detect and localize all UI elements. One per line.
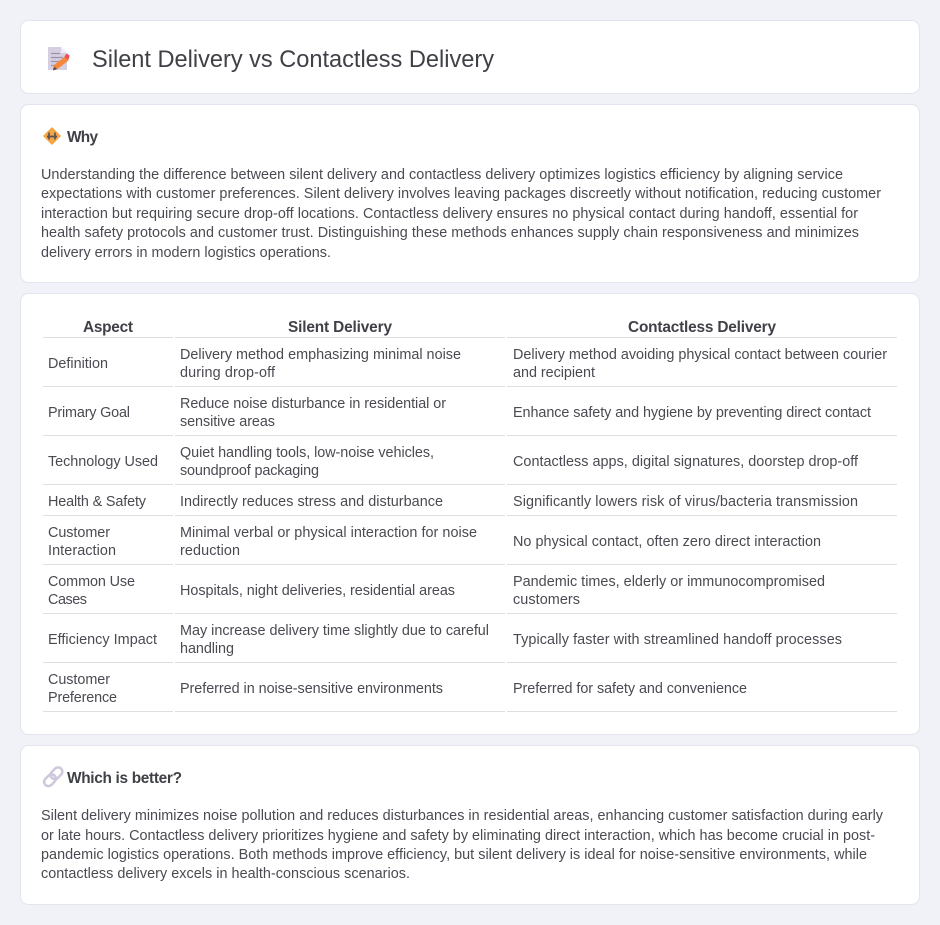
text block: why paragraph: [41, 167, 881, 261]
row: technology used: Quiet handling tools, low-noise vehicles,: [180, 445, 434, 461]
row: efficiency impact: handling: [180, 641, 234, 657]
row: primary goal: [48, 396, 871, 430]
text block: why paragraph: expectations with customer preferences. Silent delivery involves leaving packages discreetly without notification, reducing customer: [41, 186, 881, 202]
row: customer preference: Preferred for safety and convenience: [513, 681, 747, 697]
row: common use cases: Common Use: [48, 574, 135, 590]
row: common use cases: Pandemic times, elderly or immunocompromised: [513, 574, 825, 590]
row: efficiency impact: Efficiency Impact: [48, 632, 157, 648]
row: definition: Delivery method avoiding physical contact between courier: [513, 347, 887, 363]
row: common use cases: customers: [513, 592, 580, 608]
row: primary goal: Primary Goal: [48, 405, 130, 421]
row: primary goal: Reduce noise disturbance in residential or: [180, 396, 446, 412]
text block: which is better paragraph: [41, 808, 884, 882]
text block: why paragraph: interaction but requiring secure drop-off locations. Contactless delivery ensures no physical contact during handoff, essential for: [41, 206, 858, 222]
row: customer interaction: Minimal verbal or physical interaction for noise: [180, 525, 477, 541]
table header row: Contactless Delivery: [628, 319, 776, 336]
row: common use cases: Hospitals, night deliveries, residential areas: [180, 583, 455, 599]
heading: why: Why: [67, 129, 98, 146]
title: Silent Delivery vs Contactless Delivery: [92, 47, 494, 73]
row: efficiency impact: [48, 623, 842, 657]
row: customer interaction: reduction: [180, 543, 240, 559]
icon: warning diamond: [44, 128, 60, 144]
row: definition: [48, 347, 887, 381]
table header row: Aspect: [83, 319, 133, 336]
text block: which is better paragraph: Silent delivery minimizes noise pollution and reduces disturbances in residential areas, enhancing customer satisfaction during early: [41, 808, 884, 824]
panel: why: [20, 104, 920, 282]
row: definition: and recipient: [513, 365, 595, 381]
row: health and safety: Significantly lowers risk of virus/bacteria transmission: [513, 494, 858, 510]
row: definition: Definition: [48, 356, 108, 372]
row: customer preference: Preferred in noise-sensitive environments: [180, 681, 443, 697]
row: efficiency impact: May increase delivery time slightly due to careful: [180, 623, 489, 639]
row: customer interaction: Interaction: [48, 543, 116, 559]
text block: which is better paragraph: contactless delivery excels in health-conscious scenarios.: [41, 866, 410, 882]
text block: why paragraph: Understanding the difference between silent delivery and contactless delivery optimizes logistics efficiency by aligning service: [41, 167, 843, 183]
panel: comparison table: [20, 294, 920, 734]
row: technology used: [48, 445, 859, 479]
row: technology used: Technology Used: [48, 454, 158, 470]
row: customer preference: Customer: [48, 672, 110, 688]
table header row: Silent Delivery: [288, 319, 392, 336]
row: customer interaction: Customer: [48, 525, 110, 541]
row: definition: Delivery method emphasizing minimal noise: [180, 347, 461, 363]
panel: title header: [20, 20, 920, 94]
table header row: [83, 319, 776, 336]
row: efficiency impact: Typically faster with streamlined handoff processes: [513, 632, 842, 648]
row: technology used: soundproof packaging: [180, 463, 319, 479]
icon: document with pencil: [48, 47, 70, 70]
panel: which is better: [20, 746, 920, 904]
row: health and safety: [48, 494, 858, 510]
text block: why paragraph: health safety protocols and customer trust. Distinguishing these methods enhances supply chain responsiveness and minimizes: [41, 225, 859, 241]
row: common use cases: Cases: [48, 592, 87, 608]
text block: which is better paragraph: pandemic logistics operations. Both methods improve efficiency, but silent delivery is ideal for noise-sensitive environments, while: [41, 847, 867, 863]
row: customer preference: Preference: [48, 690, 117, 706]
row: health and safety: Health & Safety: [48, 494, 147, 510]
row: technology used: Contactless apps, digital signatures, doorstep drop-off: [513, 454, 859, 470]
heading: which is better: Which is better?: [67, 770, 182, 787]
row: customer preference: [48, 672, 747, 706]
text block: which is better paragraph: or late hours. Contactless delivery prioritizes hygiene and safety by eliminating direct interaction, which has become crucial in post-: [41, 828, 875, 844]
row: common use cases: [48, 574, 825, 608]
icon: link: [42, 766, 64, 788]
text block: why paragraph: delivery errors in modern logistics operations.: [41, 245, 331, 261]
row: customer interaction: [48, 525, 821, 559]
row: primary goal: Enhance safety and hygiene by preventing direct contact: [513, 405, 871, 421]
row: customer interaction: No physical contact, often zero direct interaction: [513, 534, 821, 550]
row: definition: during drop-off: [180, 365, 276, 381]
row: primary goal: sensitive areas: [180, 414, 275, 430]
row: health and safety: Indirectly reduces stress and disturbance: [180, 494, 443, 510]
